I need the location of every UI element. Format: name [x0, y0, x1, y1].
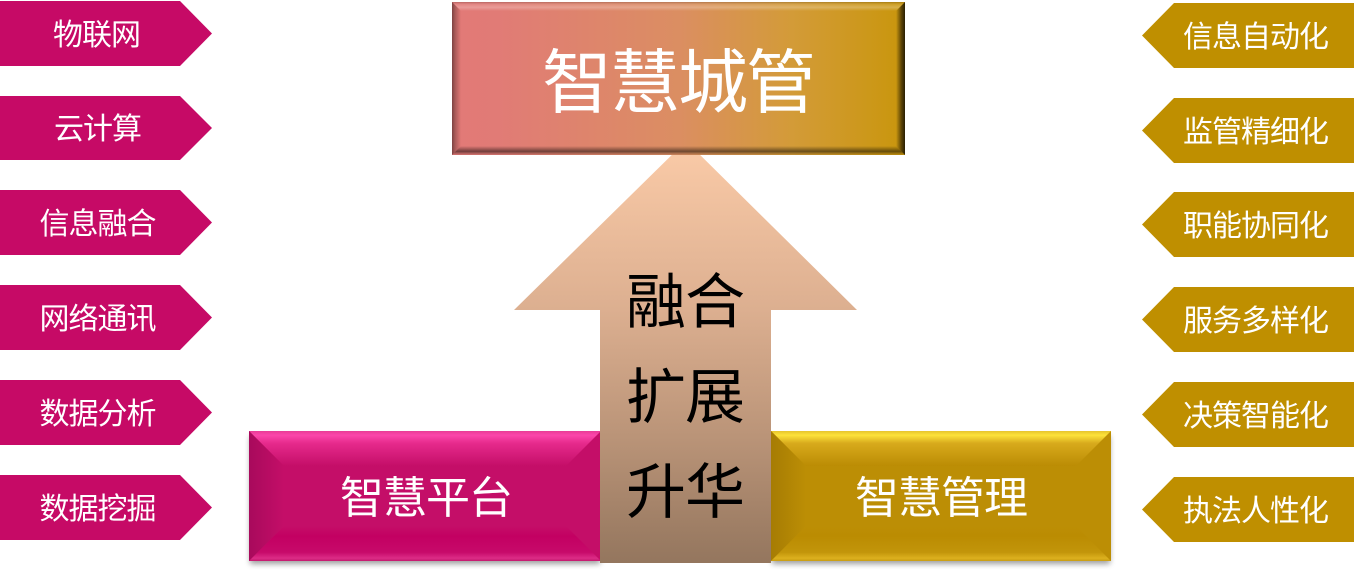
arrow: upward integration arrow [514, 141, 857, 563]
tag: 监管精细化: 监管精细化 [1183, 116, 1328, 149]
box: 智慧平台 [249, 431, 601, 564]
tag: 职能协同化 [1142, 192, 1354, 257]
box: 智慧平台: 智慧平台 [340, 474, 512, 523]
title box: 智慧城管 [452, 2, 905, 155]
tag: 数据挖掘 [0, 475, 212, 540]
tag: 数据挖掘: 数据挖掘 [40, 493, 156, 526]
tag: 监管精细化 [1142, 98, 1354, 163]
tag: 云计算 [0, 96, 212, 160]
tag: 决策智能化: 决策智能化 [1183, 400, 1328, 433]
tag: 执法人性化: 执法人性化 [1183, 495, 1328, 528]
title box: 智慧城管: 智慧城管 [542, 44, 814, 122]
tag: 信息自动化: 信息自动化 [1183, 21, 1328, 54]
panel: left technology tags [0, 1, 212, 540]
tag: 信息融合 [0, 190, 212, 255]
tag: 服务多样化: 服务多样化 [1183, 305, 1328, 338]
tag: 数据分析 [0, 380, 212, 445]
tag: 信息自动化 [1142, 3, 1354, 68]
tag: 物联网: 物联网 [53, 19, 140, 52]
tag: 职能协同化: 职能协同化 [1183, 210, 1328, 243]
tag: 物联网 [0, 1, 212, 66]
tag: 网络通讯: 网络通讯 [40, 303, 156, 336]
panel: right management tags [1142, 3, 1354, 542]
tag: 信息融合: 信息融合 [40, 208, 156, 241]
tag: 数据分析: 数据分析 [40, 398, 156, 431]
box: 智慧管理 [771, 431, 1111, 564]
tag: 云计算: 云计算 [54, 113, 141, 146]
tag: 决策智能化 [1142, 382, 1354, 447]
arrow label: 扩展: 扩展 [626, 364, 744, 431]
tag: 服务多样化 [1142, 287, 1354, 352]
box: 智慧管理: 智慧管理 [855, 474, 1027, 523]
arrow label: 融合: 融合 [626, 269, 744, 336]
tag: 网络通讯 [0, 285, 212, 350]
tag: 执法人性化 [1142, 477, 1354, 542]
arrow label: 升华: 升华 [626, 459, 744, 526]
